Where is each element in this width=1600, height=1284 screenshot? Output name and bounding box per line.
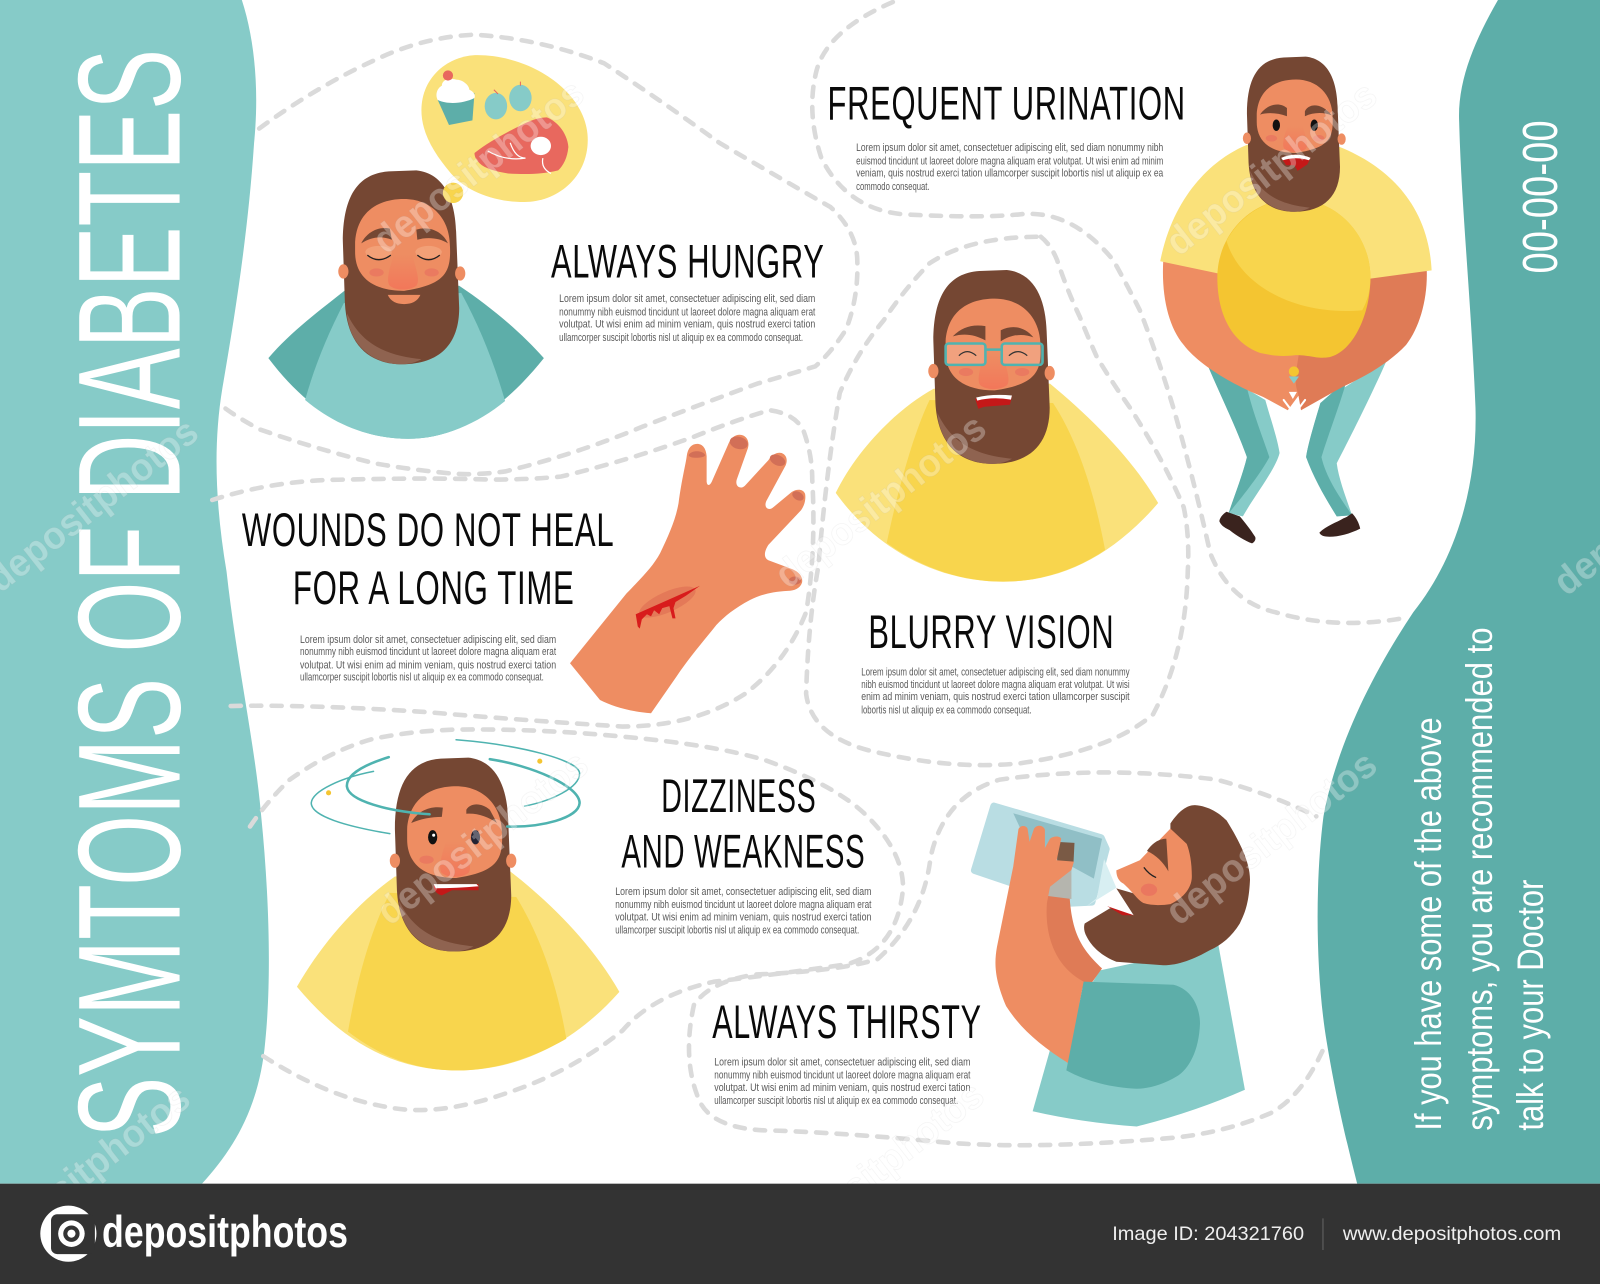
icon: plums <box>485 82 532 119</box>
text block: always thirsty: nonummy nibh euismod tincidunt ut laoreet dolore magna aliquam erat <box>714 1070 970 1082</box>
dashed outline: dizziness <box>250 729 903 1110</box>
head <box>338 170 465 364</box>
heading: wounds do not heal: FOR A LONG TIME <box>293 562 574 614</box>
watermarks: depositphotos <box>1158 73 1385 264</box>
right arm <box>1296 265 1427 410</box>
text block: blurry vision: Lorem ipsum dolor sit amet, consectetuer adipiscing elit, sed diam nonummy <box>861 667 1130 679</box>
shirt sides <box>836 384 1158 582</box>
watermarks: depositphotos <box>765 1073 992 1264</box>
doctor advice text: talk to your Doctor <box>1510 880 1551 1131</box>
dark shape seen through bottle <box>1057 842 1074 863</box>
doctor advice text: symptoms, you are recommended to <box>1459 628 1500 1131</box>
eyebrow, eye and cheek <box>1107 839 1168 915</box>
dizzy orbits <box>311 740 580 834</box>
dashed outline: hungry <box>218 35 857 474</box>
heading: always thirsty: ALWAYS THIRSTY <box>712 996 982 1048</box>
stars <box>326 759 542 795</box>
text block: wounds: volutpat. Ut wisi enim ad minim veniam, quis nostrud exerci tation <box>300 659 556 671</box>
yellow shirt <box>1160 145 1432 279</box>
wound glow <box>635 580 699 624</box>
right leg <box>1306 360 1387 516</box>
shirt front <box>305 293 505 439</box>
text block: always hungry <box>559 293 815 344</box>
text block: always thirsty <box>714 1056 970 1107</box>
brand name: depositphotos <box>102 1206 348 1257</box>
shirt front <box>348 893 566 1070</box>
heading: dizziness and weakness: AND WEAKNESS <box>621 825 865 877</box>
text block: wounds <box>300 634 556 684</box>
illustration: wounded hand <box>570 435 805 713</box>
character: dizziness man <box>297 740 619 1070</box>
shirt sides <box>297 871 619 1070</box>
glasses <box>946 343 1043 365</box>
text block: always hungry: ullamcorper suscipit lobortis nisl ut aliquip ex ea commodo consequat. <box>559 332 803 344</box>
heading: always hungry: ALWAYS HUNGRY <box>551 236 824 288</box>
heading: blurry vision: BLURRY VISION <box>868 606 1114 658</box>
text block: always thirsty: volutpat. Ut wisi enim ad minim veniam, quis nostrud exerci tation <box>714 1082 970 1094</box>
dashed outline: wounds <box>212 410 813 727</box>
icon: steak <box>474 117 568 174</box>
character: always thirsty man <box>974 805 1250 1127</box>
heading: wounds do not heal: WOUNDS DO NOT HEAL <box>242 504 614 556</box>
text block: blurry vision: lobortis nisl ut aliquip ex ea commodo consequat. <box>861 704 1032 716</box>
text block: always hungry: nonummy nibh euismod tincidunt ut laoreet dolore magna aliquam erat <box>559 306 815 318</box>
text block: dizziness: nonummy nibh euismod tincidunt ut laoreet dolore magna aliquam erat <box>615 899 871 911</box>
text block: wounds: Lorem ipsum dolor sit amet, consectetuer adipiscing elit, sed diam <box>300 634 556 646</box>
shirt front <box>887 400 1105 582</box>
watermarks: depositphotos <box>767 406 994 597</box>
watermarks: depositphotos <box>1158 743 1385 934</box>
hair and beard <box>1084 805 1250 965</box>
heading: frequent urination: FREQUENT URINATION <box>828 77 1186 129</box>
text block: always thirsty: ullamcorper suscipit lobortis nisl ut aliquip ex ea commodo consequat. <box>714 1095 958 1107</box>
text block: dizziness: Lorem ipsum dolor sit amet, consectetuer adipiscing elit, sed diam <box>615 886 871 898</box>
water bottle <box>974 806 1116 906</box>
image id: Image ID: 204321760 <box>1112 1223 1304 1245</box>
panel: left teal wave <box>0 0 269 1184</box>
text block: dizziness: ullamcorper suscipit lobortis nisl ut aliquip ex ea commodo consequat. <box>615 925 859 937</box>
ring and fingertips <box>1284 366 1305 408</box>
sleeve <box>1066 982 1200 1089</box>
belly <box>1217 199 1370 358</box>
thought bubble with food <box>421 55 588 203</box>
character: frequent urination man <box>1160 57 1432 543</box>
heading: wounds do not heal <box>242 504 614 614</box>
text block: blurry vision: nibh euismod tincidunt ut laoreet dolore magna aliquam erat volutpat. Ut wisi <box>861 679 1130 691</box>
dashed outline: thirsty <box>689 772 1322 1145</box>
face <box>1116 829 1192 905</box>
dashed outline: blurry vision <box>806 237 1188 765</box>
text block: frequent urination <box>856 142 1163 193</box>
text block: blurry vision <box>861 667 1130 716</box>
head <box>1243 57 1346 212</box>
watermarks: depositphotos <box>365 71 592 262</box>
panel: right teal wave <box>1318 0 1600 1184</box>
text block: dizziness: volutpat. Ut wisi enim ad minim veniam, quis nostrud exerci tation <box>615 911 871 923</box>
doctor advice text: If you have some of the above <box>1408 717 1449 1131</box>
text block: frequent urination: veniam, quis nostrud exerci tation ullamcorper suscipit lobortis nisl ut aliquip ex ea <box>856 168 1163 180</box>
character: blurry vision man <box>836 270 1158 582</box>
heading: dizziness and weakness <box>621 770 865 877</box>
shoes <box>1219 512 1360 543</box>
fingernails <box>689 435 805 585</box>
character: always hungry man <box>268 55 588 439</box>
heading: dizziness and weakness: DIZZINESS <box>661 770 816 822</box>
watermarks: depositphotos <box>369 743 596 934</box>
text block: frequent urination: Lorem ipsum dolor sit amet, consectetuer adipiscing elit, sed diam nonummy nibh <box>856 142 1163 154</box>
shirt <box>1033 945 1245 1127</box>
text block: wounds: ullamcorper suscipit lobortis nisl ut aliquip ex ea commodo consequat. <box>300 672 544 684</box>
text block: always hungry: Lorem ipsum dolor sit amet, consectetuer adipiscing elit, sed diam <box>559 293 815 305</box>
phone number: 00-00-00 <box>1514 120 1568 273</box>
head <box>390 758 516 952</box>
far arm <box>1038 893 1102 990</box>
icon: cupcake <box>437 70 475 125</box>
bleeding cut <box>636 586 700 629</box>
shirt shoulders <box>268 286 544 439</box>
text block: always thirsty: Lorem ipsum dolor sit amet, consectetuer adipiscing elit, sed diam <box>714 1056 970 1068</box>
doctor advice text <box>1408 628 1551 1131</box>
dashed outline: urination <box>812 2 1408 623</box>
icon: camera logo <box>40 1206 96 1262</box>
footer bar <box>0 1184 1600 1284</box>
text block: frequent urination: commodo consequat. <box>856 181 930 193</box>
left arm <box>1163 260 1306 410</box>
text block: wounds: nonummy nibh euismod tincidunt ut laoreet dolore magna aliquam erat <box>300 646 556 658</box>
bottle seen below hand <box>1047 865 1071 899</box>
text block: frequent urination: euismod tincidunt ut laoreet dolore magna aliquam erat volutpat. Ut wisi enim ad minim <box>856 155 1163 167</box>
website: www.depositphotos.com <box>1342 1223 1561 1245</box>
text block: dizziness <box>615 886 871 937</box>
text block: blurry vision: enim ad minim veniam, quis nostrud exerci tation ullamcorper suscipit <box>861 691 1130 703</box>
head <box>928 270 1055 464</box>
left leg <box>1208 366 1280 516</box>
text block: always hungry: volutpat. Ut wisi enim ad minim veniam, quis nostrud exerci tation <box>559 319 815 331</box>
near arm and hand <box>995 826 1084 1063</box>
